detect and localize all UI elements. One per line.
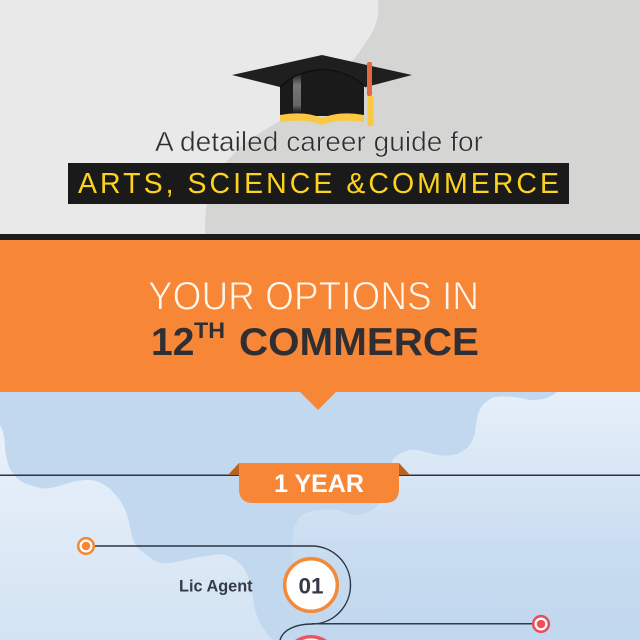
panel: orange heading band — [0, 240, 640, 410]
title banner: ARTS, SCIENCE &COMMERCE — [78, 168, 559, 200]
node: red end — [533, 616, 549, 632]
badge: 01 — [285, 559, 337, 611]
heading line one: YOUR OPTIONS IN — [148, 274, 479, 318]
icon: graduation cap — [232, 55, 412, 126]
subtitle: A detailed career guide for — [155, 126, 483, 157]
heading line two: TH — [194, 318, 225, 343]
timeline rule — [0, 474, 640, 476]
panel: sky background — [0, 392, 640, 640]
ribbon: 1 year: 1 YEAR — [274, 470, 364, 498]
connector to right node — [312, 623, 534, 624]
heading line two: 12 — [151, 321, 194, 364]
connector path — [94, 546, 350, 640]
divider bar — [0, 234, 640, 240]
badge: 01: 01 — [298, 574, 324, 598]
badge: next step, cropped — [295, 635, 327, 640]
panel: header background — [0, 0, 640, 236]
heading line two — [151, 318, 479, 364]
node: orange start — [78, 538, 94, 554]
ribbon: 1 year — [228, 463, 410, 503]
label: Lic Agent: Lic Agent — [179, 578, 253, 596]
heading line two: COMMERCE — [239, 321, 479, 364]
